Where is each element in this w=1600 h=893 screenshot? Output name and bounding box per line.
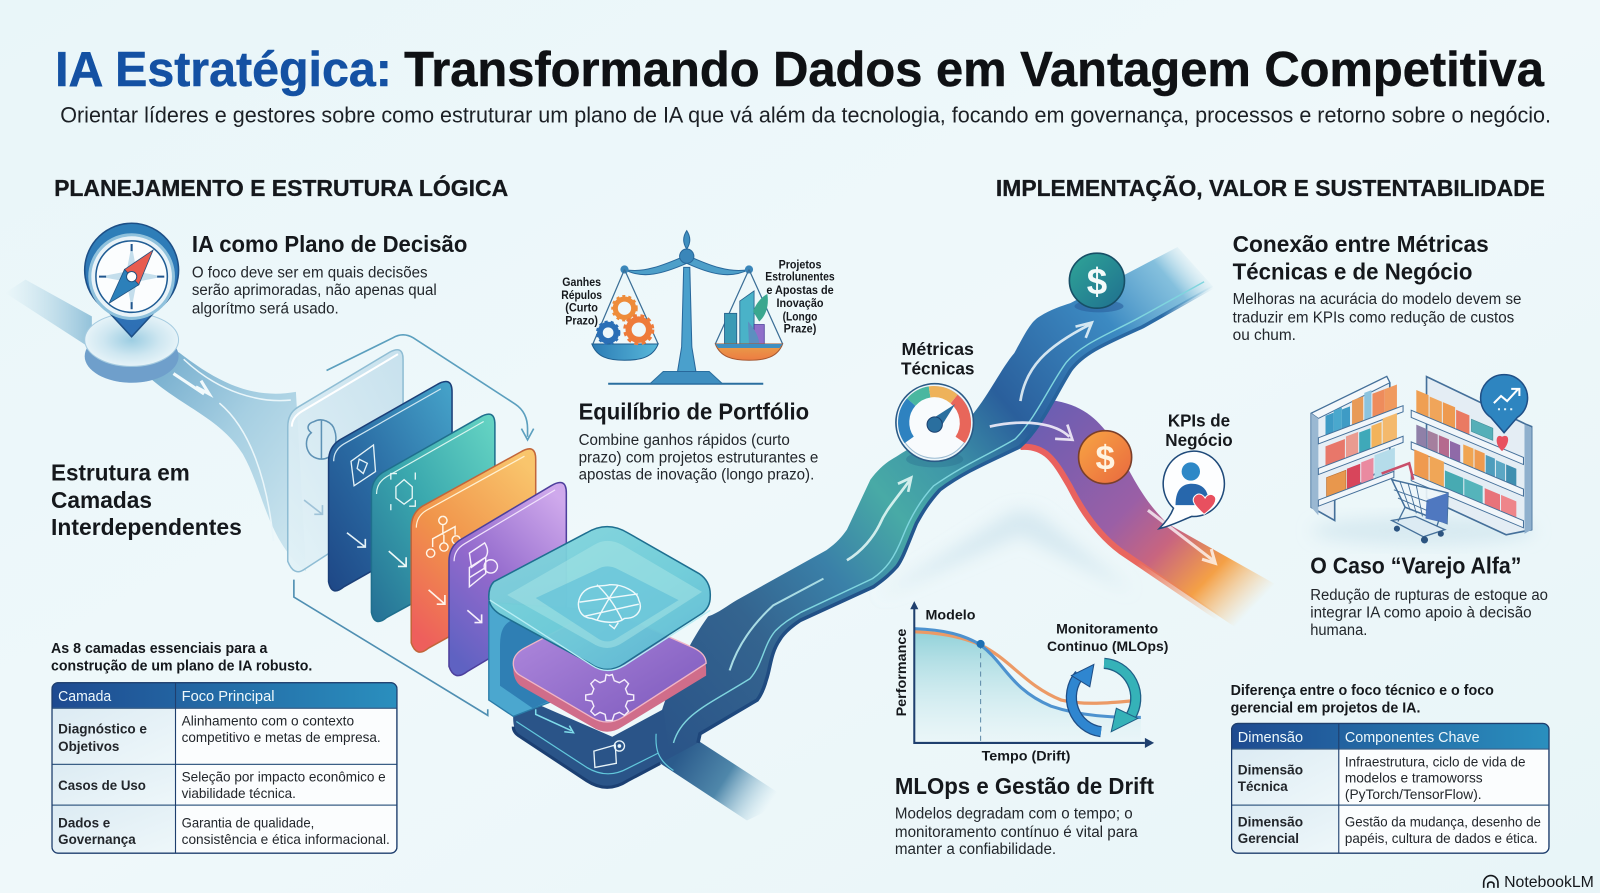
table caption: right: gerencial em projetos de IA. bbox=[1231, 700, 1420, 716]
scale label: long term: Inovação bbox=[777, 296, 823, 310]
row: técnica: modelos e tramoworss bbox=[1345, 771, 1483, 787]
scale label: long term: Praze) bbox=[784, 322, 816, 336]
left shelf bbox=[1311, 377, 1403, 520]
heading: Equilíbrio de Portfólio: prazo) com projetos estruturantes e bbox=[579, 449, 818, 466]
icon: orange dollar coin bbox=[1079, 431, 1132, 484]
heading: MLOps e Gestão de Drift: manter a confiabilidade. bbox=[895, 841, 1056, 858]
header row: Dimensão bbox=[1238, 730, 1303, 746]
chart: performance drift bbox=[894, 601, 1169, 764]
icon: dashboard bbox=[594, 741, 624, 767]
heading: O Caso Varejo Alfa: O Caso “Varejo Alfa” bbox=[1310, 553, 1521, 579]
left pan bbox=[592, 296, 658, 360]
heading: Equilíbrio de Portfólio: Combine ganhos rápidos (curto bbox=[579, 432, 790, 449]
label: KPIs de Negócio bbox=[1165, 411, 1233, 450]
title: IA Estratégica: bbox=[55, 43, 392, 97]
label: Métricas Técnicas bbox=[901, 339, 974, 379]
heading: O Caso Varejo Alfa: integrar IA como apoio à decisão bbox=[1310, 604, 1532, 621]
scale label: long term bbox=[765, 257, 835, 336]
heading: IA como Plano de Decisão: O foco deve ser em quais decisões bbox=[192, 265, 428, 282]
row: Dados: Dados e bbox=[58, 816, 110, 832]
layer 1: blue bbox=[329, 381, 452, 591]
heading: IA como Plano de Decisão: serão aprimoradas, não apenas qual bbox=[192, 282, 437, 299]
row: técnica: Infraestrutura, ciclo de vida de bbox=[1345, 754, 1526, 770]
dark slab bbox=[513, 702, 673, 787]
row: gerencial bbox=[1238, 815, 1541, 847]
heading: O Caso Varejo Alfa bbox=[1310, 553, 1548, 639]
heading: Conexão entre Métricas: ou chum. bbox=[1233, 327, 1296, 344]
icon: globe bbox=[578, 585, 640, 629]
scale label: short term bbox=[561, 275, 602, 328]
row: gerencial: Gerencial bbox=[1238, 831, 1299, 847]
row: Diagnóstico: Objetivos bbox=[58, 739, 119, 755]
road: lower fade bbox=[660, 742, 790, 820]
scale label: long term: e Apostas de bbox=[766, 283, 834, 297]
label: KPIs de Negócio: KPIs de bbox=[1168, 411, 1230, 431]
road: branch to business KPIs bbox=[1016, 400, 1274, 630]
glass block arch bbox=[489, 602, 622, 716]
table caption: left bbox=[51, 641, 312, 674]
table caption: left: As 8 camadas essenciais para a bbox=[51, 641, 268, 657]
row: técnica bbox=[1238, 754, 1526, 803]
right shelf bbox=[1411, 377, 1532, 535]
header row bbox=[58, 689, 274, 705]
heading: Estrutura em Camadas bbox=[51, 460, 242, 540]
heading: Equilíbrio de Portfólio bbox=[579, 398, 818, 484]
heading: Estrutura em Camadas: Interdependentes bbox=[51, 514, 242, 540]
right pan bbox=[715, 291, 783, 360]
road: flow into layers bbox=[5, 280, 306, 572]
icon: customer bubble bbox=[1159, 451, 1224, 529]
row: Dados bbox=[58, 816, 390, 848]
row: Casos de Uso: Casos de Uso bbox=[58, 778, 146, 794]
header row: Componentes Chave bbox=[1345, 730, 1480, 746]
row: Diagnóstico: Alinhamento com o contexto bbox=[182, 714, 354, 730]
heading: Conexão entre Métricas: Técnicas e de Negócio bbox=[1233, 259, 1472, 285]
table caption: right bbox=[1231, 683, 1494, 716]
heading: Conexão entre Métricas: traduzir em KPIs como redução de custos bbox=[1233, 310, 1515, 327]
layered panels bbox=[288, 350, 566, 676]
heading: IA como Plano de Decisão bbox=[192, 231, 467, 317]
icon: balance scale bbox=[592, 231, 783, 384]
glass model block bbox=[489, 527, 710, 670]
icon: gauge bbox=[896, 384, 973, 467]
heading: MLOps e Gestão de Drift: MLOps e Gestão de Drift bbox=[895, 773, 1154, 799]
row: gerencial: Dimensão bbox=[1238, 815, 1303, 831]
heading: Equilíbrio de Portfólio: apostas de inovação (longo prazo). bbox=[579, 467, 814, 484]
subtitle: Orientar líderes e gestores sobre como estruturar um plano de IA que vá além da tecnologia, focando em governança, processos e retorno sobre o negócio. bbox=[60, 103, 1551, 128]
row: Diagnóstico: competitivo e metas de empresa. bbox=[182, 730, 381, 746]
icon: teal dollar coin bbox=[1069, 253, 1124, 312]
scale label: long term: Estrolunentes bbox=[765, 270, 835, 284]
icon: orange dollar coin: $ bbox=[1095, 439, 1115, 477]
row: técnica: Técnica bbox=[1238, 779, 1289, 795]
layer 2: teal bbox=[371, 414, 495, 622]
title: Transformando Dados em Vantagem Competitiva bbox=[404, 43, 1545, 97]
brand mark: NotebookLM bbox=[1504, 874, 1594, 891]
chart label: Monitoramento: Continuo (MLOps) bbox=[1047, 639, 1169, 655]
arrow: bracket under layers bbox=[294, 580, 488, 715]
icon: retail shelves and cart bbox=[1311, 375, 1536, 545]
chart label: Monitoramento: Monitoramento bbox=[1056, 622, 1158, 638]
row: gerencial: papéis, cultura de dados e ética. bbox=[1345, 831, 1538, 847]
label: Métricas Técnicas: Técnicas bbox=[901, 359, 974, 379]
header row: Camada bbox=[58, 689, 112, 705]
heading: Conexão entre Métricas: Conexão entre Métricas bbox=[1233, 231, 1489, 257]
row: gerencial: Gestão da mudança, desenho de bbox=[1345, 815, 1541, 831]
section heading: left: PLANEJAMENTO E ESTRUTURA LÓGICA bbox=[54, 174, 508, 201]
row: Dados: Garantia de qualidade, bbox=[182, 816, 314, 832]
layer 3: orange bbox=[411, 449, 536, 652]
road: main path to technical metrics bbox=[654, 247, 1213, 763]
label: Métricas Técnicas: Métricas bbox=[902, 339, 974, 359]
table: camadas bbox=[52, 683, 397, 853]
table caption: right: Diferença entre o foco técnico e o foco bbox=[1231, 683, 1494, 699]
heading: O Caso Varejo Alfa: humana. bbox=[1310, 622, 1367, 639]
label: KPIs de Negócio: Negócio bbox=[1165, 430, 1233, 450]
heading: IA como Plano de Decisão: IA como Plano de Decisão bbox=[192, 231, 467, 257]
heading: Estrutura em Camadas: Camadas bbox=[51, 487, 152, 513]
heading: MLOps e Gestão de Drift: monitoramento contínuo é vital para bbox=[895, 824, 1138, 841]
icon: gear bbox=[586, 675, 634, 720]
scale label: long term: (Longo bbox=[783, 309, 817, 323]
soft shadow under branch bbox=[878, 510, 1133, 597]
table: dimensões bbox=[1232, 724, 1549, 853]
row: Diagnóstico: Diagnóstico e bbox=[58, 722, 147, 738]
chart label: Modelo: Modelo bbox=[926, 607, 976, 623]
heading: O Caso Varejo Alfa: Redução de rupturas de estoque ao bbox=[1310, 587, 1548, 604]
row: Dados: consistência e ética informacional. bbox=[182, 832, 390, 848]
row: Casos de Uso bbox=[58, 770, 386, 802]
scale label: short term: Répulos bbox=[561, 288, 602, 302]
heading: MLOps e Gestão de Drift: Modelos degradam com o tempo; o bbox=[895, 805, 1133, 822]
heading: Conexão entre Métricas bbox=[1233, 231, 1521, 344]
arrow: bracket over layers bbox=[327, 335, 534, 440]
scale label: short term: Prazo) bbox=[565, 314, 598, 328]
icon: monitoring cycle bbox=[1071, 663, 1138, 732]
heading: Equilíbrio de Portfólio: Equilíbrio de Portfólio bbox=[579, 398, 809, 424]
heading: Estrutura em Camadas: Estrutura em bbox=[51, 460, 190, 486]
row: Diagnóstico bbox=[58, 714, 381, 755]
row: técnica: (PyTorch/TensorFlow). bbox=[1345, 787, 1482, 803]
chart label: Monitoramento bbox=[1047, 622, 1169, 655]
chart label: Tempo: Tempo (Drift) bbox=[982, 748, 1071, 764]
section heading: right: IMPLEMENTAÇÃO, VALOR E SUSTENTABILIDADE bbox=[996, 174, 1545, 201]
row: Casos de Uso: viabilidade técnica. bbox=[182, 786, 296, 802]
purple hardware layer bbox=[513, 607, 706, 732]
header row: Foco Principal bbox=[182, 689, 274, 705]
layer 0: glass bbox=[288, 350, 403, 572]
heading: Conexão entre Métricas: Melhoras na acurácia do modelo devem se bbox=[1233, 291, 1521, 308]
header row bbox=[1238, 730, 1480, 746]
heading: IA como Plano de Decisão: algorítmo será usado. bbox=[192, 300, 339, 317]
row: técnica: Dimensão bbox=[1238, 763, 1303, 779]
row: Casos de Uso: Seleção por impacto econômico e bbox=[182, 770, 386, 786]
icon: trend pin bbox=[1481, 375, 1528, 433]
layer 4: purple bbox=[449, 482, 566, 676]
heading: MLOps e Gestão de Drift bbox=[895, 773, 1154, 858]
row: Dados: Governança bbox=[58, 832, 137, 848]
icon: teal dollar coin: $ bbox=[1087, 261, 1107, 302]
scale label: long term: Projetos bbox=[779, 257, 822, 271]
chart label: Performance: Performance bbox=[894, 628, 909, 716]
cart bbox=[1382, 463, 1448, 543]
scale label: short term: (Curto bbox=[565, 300, 598, 314]
table caption: left: construção de um plano de IA robusto. bbox=[51, 658, 312, 674]
icon: compass pin on base bbox=[85, 223, 179, 383]
scale label: short term: Ganhes bbox=[562, 275, 601, 289]
